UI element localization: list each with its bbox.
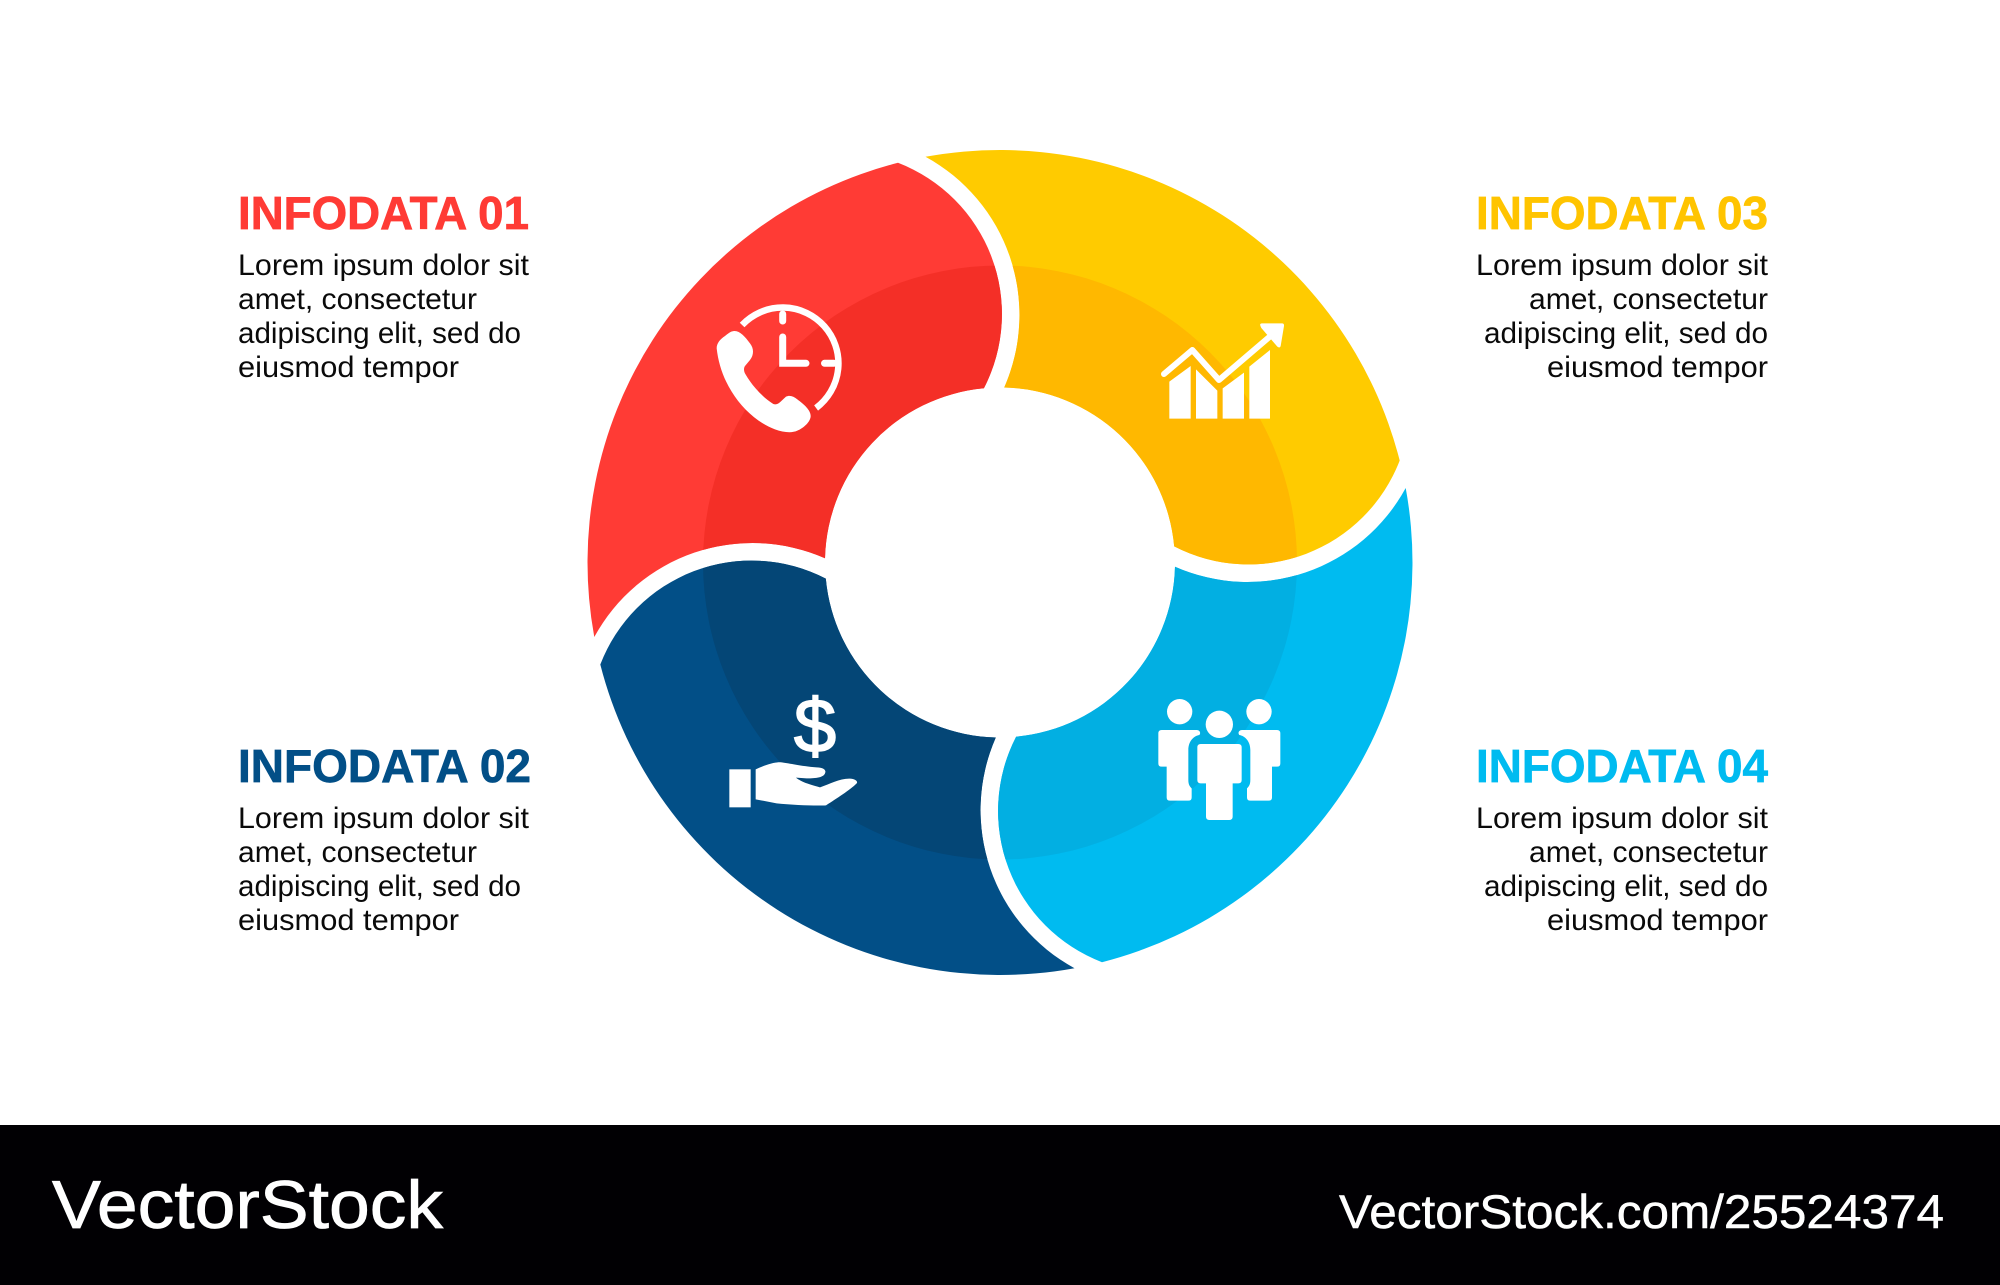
segment: dark blue [600,560,1074,975]
body text 01: amet, consectetur [238,283,477,316]
body text 04: eiusmod tempor [1547,904,1768,937]
body text 03: adipiscing elit, sed do [1484,317,1768,350]
body text 02: adipiscing elit, sed do [238,870,521,903]
body text 01: adipiscing elit, sed do [238,317,521,350]
icon: rising bar chart [1164,323,1284,419]
segment: red [588,162,1002,637]
body text 02: amet, consectetur [238,836,477,869]
footer logo: VectorStock [52,1167,444,1243]
heading: infodata 02: INFODATA 02 [238,740,531,792]
donut chart [588,150,1412,975]
body text 03: eiusmod tempor [1547,351,1768,384]
text block: infodata 04 [1476,740,1769,937]
heading: infodata 03: INFODATA 03 [1476,187,1768,239]
body text 01: Lorem ipsum dolor sit [238,249,530,282]
icon: phone with clock [717,308,838,432]
text block: infodata 01 [238,187,530,384]
text block: infodata 02 [238,740,531,937]
footer url: VectorStock.com/25524374 [1339,1185,1944,1238]
body text 03: amet, consectetur [1529,283,1768,316]
body text 04: adipiscing elit, sed do [1484,870,1768,903]
body text 02: eiusmod tempor [238,904,459,937]
text block: infodata 03 [1476,187,1769,384]
body text 03 [1476,249,1769,384]
footer bar [0,1125,2000,1285]
segment: yellow [926,150,1400,564]
body text 03: Lorem ipsum dolor sit [1476,249,1769,282]
heading: infodata 01: INFODATA 01 [238,187,529,239]
body text 04: Lorem ipsum dolor sit [1476,802,1769,835]
body text 04: amet, consectetur [1529,836,1768,869]
heading: infodata 04: INFODATA 04 [1476,740,1768,792]
body text 02: Lorem ipsum dolor sit [238,802,530,835]
body text 04 [1476,802,1769,937]
body text 01 [238,249,530,384]
body text 01: eiusmod tempor [238,351,459,384]
icon: three people [1158,699,1280,820]
icon: hand holding dollar: $ [794,684,836,769]
icon: hand holding dollar [729,684,857,807]
body text 02 [238,802,530,937]
segment: cyan [998,488,1412,962]
